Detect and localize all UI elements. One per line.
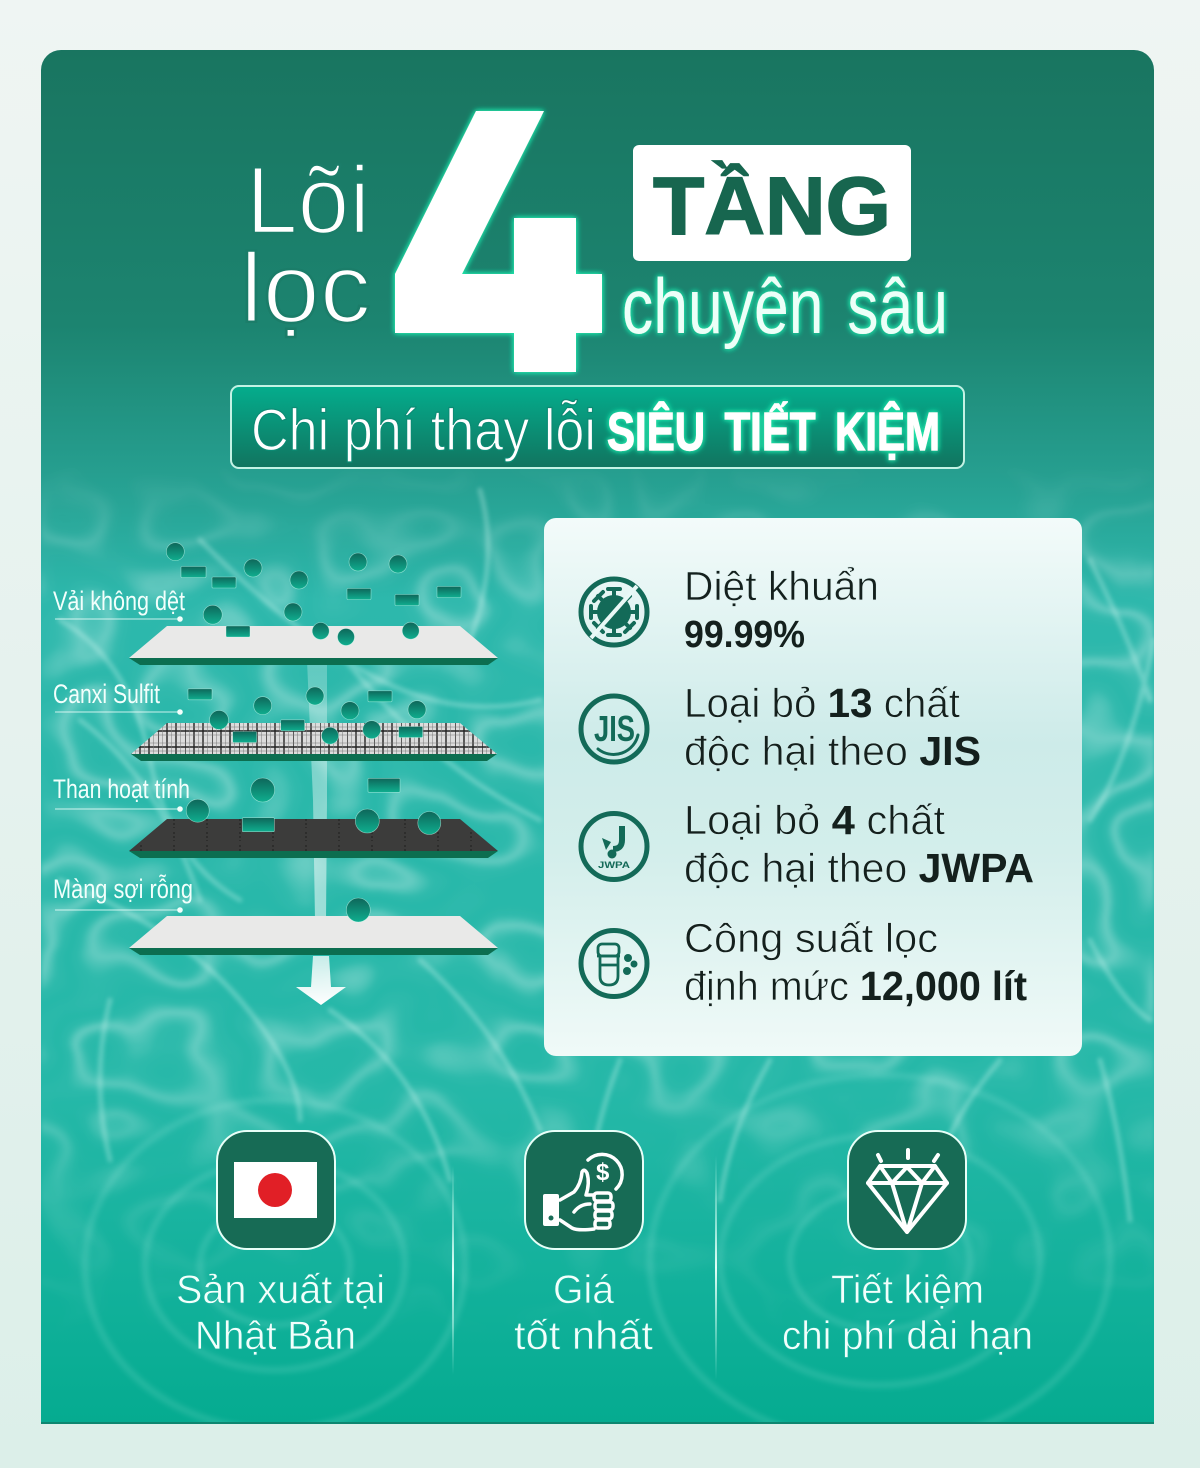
icon: thumbs up with coin [525,1131,643,1249]
text: long-term saving: chi phí dài hạn [782,1314,1033,1358]
title text: chuyên sâu: chuyên sâu [622,262,948,350]
label: Than hoạt tính: Than hoạt tính [53,774,190,804]
particles [166,543,461,922]
feature: made in Japan [176,1131,385,1358]
text: long-term saving: Tiết kiệm [831,1268,984,1312]
feature: best price [514,1131,653,1358]
title text: Lõi lọc: Lõi [246,147,370,254]
text: removes 13 JIS substances: độc hại theo JIS [684,728,981,774]
layer 4: hollow fiber membrane [129,916,498,955]
icon: thumbs up with coin: $ [596,1159,610,1186]
banner: cost saving: SIÊU TIẾT KIỆM [607,401,940,462]
text: removes 13 JIS substances: Loại bỏ 13 chất [684,680,961,726]
title text: Lõi lọc [240,147,371,343]
icon: JWPA: JWPA [598,860,630,871]
separators [452,1155,717,1380]
text: long-term saving [782,1268,1033,1358]
title [240,35,948,451]
feature: long-term saving [782,1131,1033,1358]
text: filter capacity: Công suất lọc [684,915,938,961]
arrow: water flow [296,956,346,1005]
label: Vải không dệt [53,586,185,622]
text: best price: tốt nhất [514,1314,653,1358]
title text: Lõi lọc: lọc [240,233,371,343]
text: best price: Giá [553,1268,615,1312]
text: kills bacteria: Diệt khuẩn [684,563,879,609]
text: kills bacteria: 99.99% [684,614,805,656]
text: made in Japan: Nhật Bản [195,1314,356,1358]
icon: antibacterial [581,579,647,645]
text: removes 4 JWPA substances [684,797,1034,891]
icon: diamond [848,1131,966,1249]
icon: JIS [581,696,647,762]
icon: JIS: JIS [594,708,635,749]
layer 2: calcium sulfite [131,723,497,761]
banner: cost saving [231,386,964,468]
water column [307,660,327,920]
icon: JWPA [581,814,647,880]
badge: TẦNG: TẦNG [653,161,891,252]
badge: TẦNG [633,145,911,261]
icon: filter capacity [581,930,647,996]
icon: Japan flag [217,1131,335,1249]
text: made in Japan: Sản xuất tại [176,1268,385,1312]
text: kills bacteria [684,563,879,656]
text: removes 4 JWPA substances: Loại bỏ 4 chất [684,797,946,843]
text: filter capacity: định mức 12,000 lít [684,963,1027,1009]
big numeral 4: 4 [388,35,613,451]
text: made in Japan [176,1268,385,1358]
text: removes 4 JWPA substances: độc hại theo JWPA [684,845,1034,891]
text: filter capacity [684,915,1027,1009]
filter layers diagram [53,543,498,1005]
label: Canxi Sulfit: Canxi Sulfit [53,679,160,709]
layer 1: non-woven fabric [129,626,498,665]
label: Màng sợi rỗng: Màng sợi rỗng [53,873,193,904]
layer 3: activated carbon [129,819,498,858]
label: Màng sợi rỗng [53,873,193,913]
text: removes 13 JIS substances [684,680,981,774]
label: Than hoạt tính [53,774,190,812]
banner: cost saving: Chi phí thay lỗi [251,398,596,463]
label: Vải không dệt: Vải không dệt [53,586,185,616]
panel: benefits card [544,518,1082,1056]
text: best price [514,1268,653,1358]
